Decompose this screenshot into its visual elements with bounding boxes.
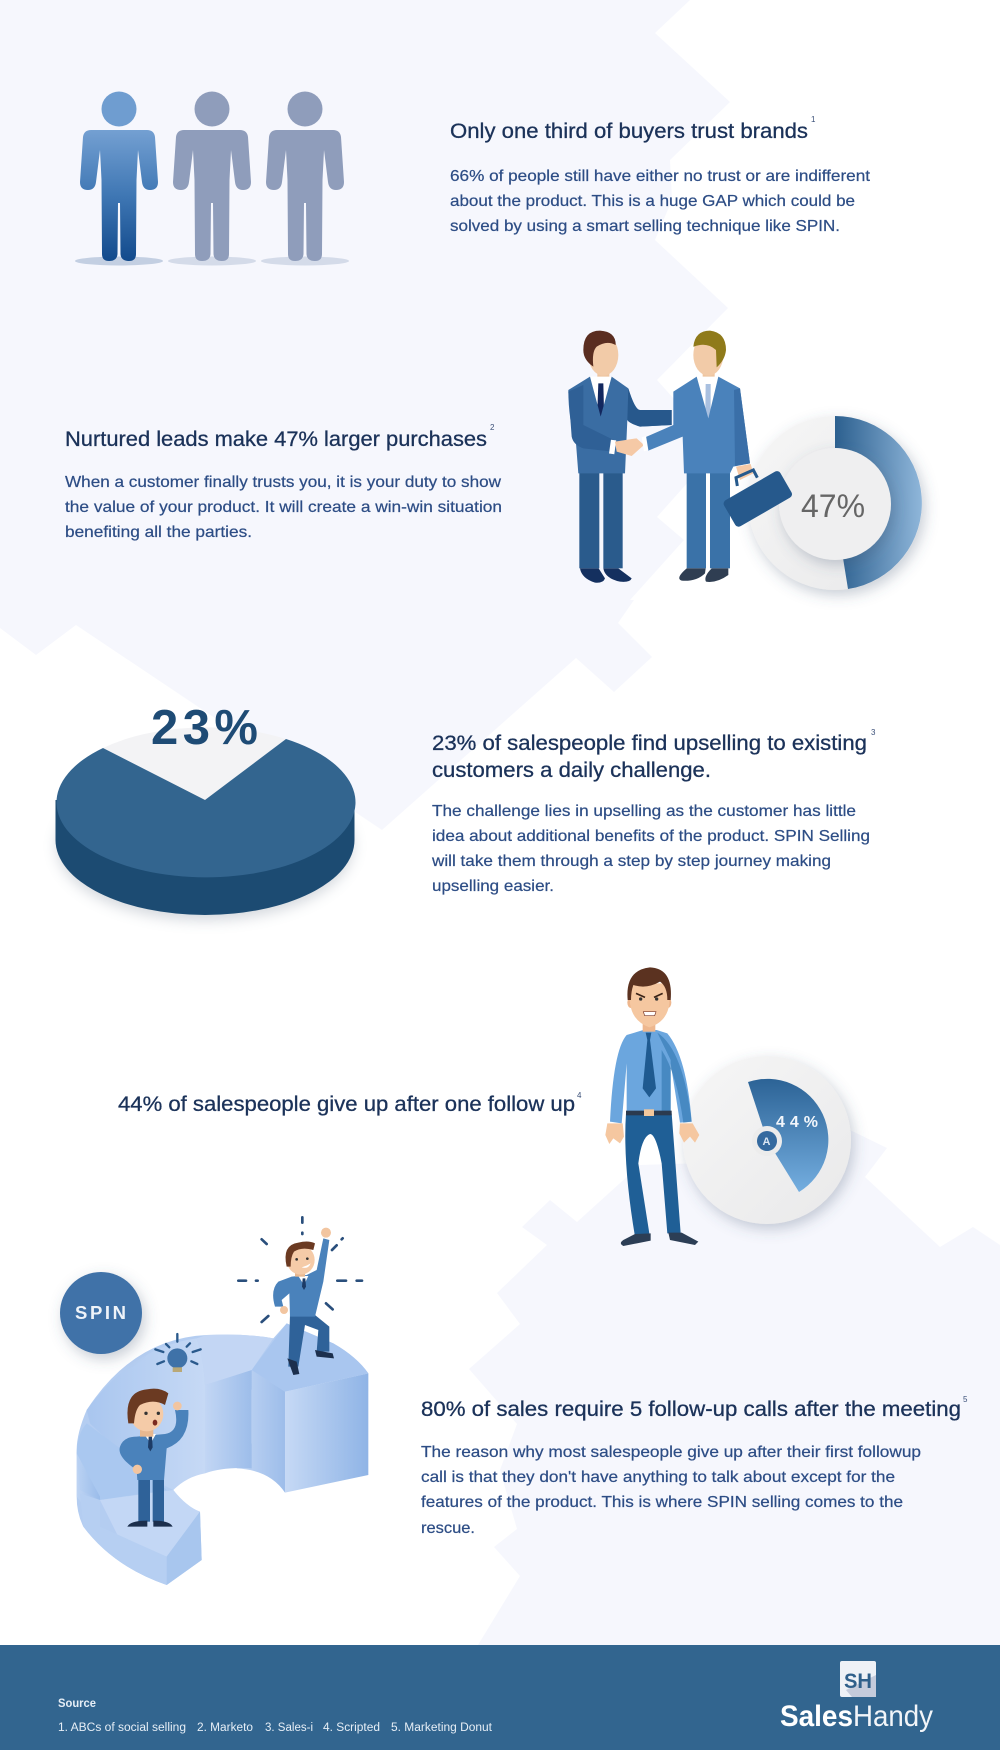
chart: 44% dial: A — [762, 1136, 770, 1148]
logo: SalesHandy: Handy — [853, 1700, 933, 1733]
source list: 4. Scripted — [323, 1722, 380, 1734]
text block: nurtured leads: When a customer finally trusts you, it is your duty to show — [65, 474, 501, 491]
text block: follow-up calls: features of the product. This is where SPIN selling comes to the — [421, 1494, 903, 1511]
text block: nurtured leads — [65, 423, 502, 541]
text block: buyers trust: about the product. This is a huge GAP which could be — [450, 193, 855, 210]
text block: follow-up calls: 80% of sales require 5 follow-up calls after the meeting — [421, 1398, 961, 1421]
text block: buyers trust: 1 — [811, 115, 816, 124]
text block: upselling challenge — [431, 728, 876, 895]
text block: follow-up calls: call is that they don't have anything to talk about except for the — [421, 1469, 895, 1486]
text block: buyers trust: Only one third of buyers trust brands — [450, 120, 808, 143]
source list: 3. Sales-i — [265, 1722, 313, 1734]
chart: 23% 3D pie: 23% — [151, 701, 258, 755]
chart: 47% donut: 47% — [801, 488, 865, 524]
figure: thinking salesman — [120, 1389, 188, 1527]
text block: upselling challenge: upselling easier. — [432, 878, 554, 895]
text block: nurtured leads: benefiting all the parties. — [65, 524, 252, 541]
text block: follow-up calls: 5 — [963, 1395, 968, 1404]
text block: give up after follow up: 44% of salespeople give up after one follow up — [118, 1093, 575, 1116]
logo: SalesHandy: SH — [844, 1670, 872, 1693]
logo: SalesHandy — [780, 1661, 933, 1733]
chart: 44% dial: 44% — [776, 1114, 818, 1131]
illustration: two businessmen shaking hands — [568, 331, 793, 583]
text block: nurtured leads: the value of your product. It will create a win-win situation — [65, 499, 502, 516]
text block: buyers trust — [450, 115, 871, 235]
text block: upselling challenge: 3 — [871, 728, 876, 737]
source list: 1. ABCs of social selling — [58, 1722, 186, 1734]
badge: SPIN — [60, 1272, 142, 1354]
text block: follow-up calls — [421, 1395, 968, 1537]
text block: buyers trust: 66% of people still have either no trust or are indifferent — [450, 168, 871, 185]
badge: SPIN: SPIN — [75, 1302, 126, 1323]
footer — [0, 1645, 1000, 1750]
source list: 5. Marketing Donut — [391, 1722, 493, 1734]
illustration: angry salesman — [605, 967, 699, 1246]
text block: nurtured leads: Nurtured leads make 47% larger purchases — [65, 428, 487, 451]
illustration: stairs with two salesmen — [77, 1217, 368, 1585]
text block: upselling challenge: customers a daily challenge. — [432, 759, 711, 782]
icon: three people, one highlighted — [75, 92, 349, 266]
logo: SalesHandy: Sales — [780, 1700, 853, 1733]
text block: upselling challenge: idea about additional benefits of the product. SPIN Selling — [432, 828, 870, 845]
text block: upselling challenge: 23% of salespeople find upselling to existing — [432, 732, 867, 755]
chart: 44% dial — [683, 1056, 851, 1224]
text block: upselling challenge: The challenge lies in upselling as the customer has little — [432, 803, 856, 820]
source list: 2. Marketo — [197, 1722, 253, 1734]
figure: cheering salesman — [238, 1217, 362, 1375]
text block: buyers trust: solved by using a smart selling technique like SPIN. — [450, 218, 840, 235]
chart: 23% 3D pie — [56, 701, 356, 920]
source list — [58, 1698, 493, 1734]
source list: Source — [58, 1698, 96, 1710]
icon: lightbulb — [155, 1334, 201, 1372]
text block: follow-up calls: rescue. — [421, 1520, 475, 1537]
text block: upselling challenge: will take them through a step by step journey making — [431, 853, 831, 870]
text block: follow-up calls: The reason why most salespeople give up after their first followup — [421, 1444, 921, 1461]
text block: nurtured leads: 2 — [490, 423, 495, 432]
text block: give up after follow up: 4 — [577, 1091, 582, 1100]
chart: 47% donut — [748, 416, 922, 590]
